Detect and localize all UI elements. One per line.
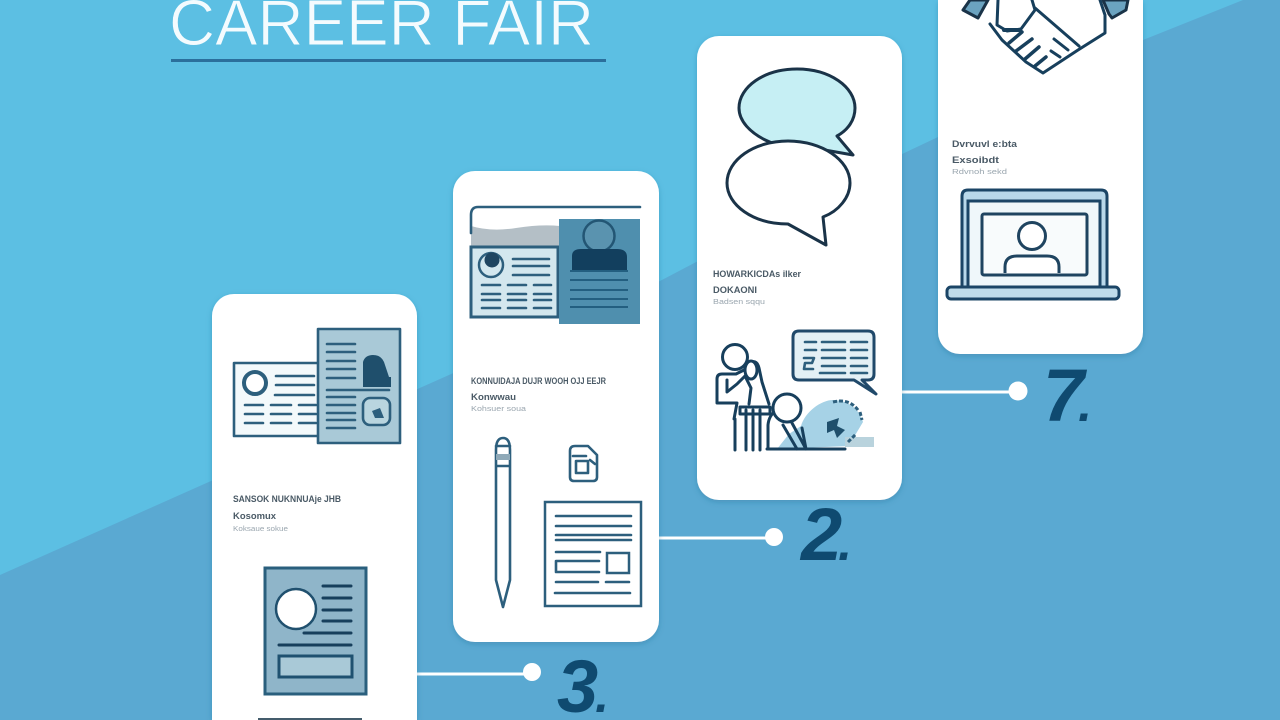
- icon: laptop video call: [947, 190, 1119, 299]
- icon: resume document: [265, 568, 366, 694]
- icon: overlapping resumes: [234, 329, 400, 443]
- icon: handshake: [963, 0, 1128, 73]
- number 2: 2.: [799, 493, 852, 576]
- icon: speech bubbles: [727, 69, 855, 245]
- panel: card two: [453, 171, 659, 642]
- card three heading: HOWARKICDAs ilker: [713, 269, 801, 279]
- connector: step 7: [902, 382, 1028, 400]
- connector: step 3: [417, 663, 541, 681]
- panel: card one: [212, 294, 417, 720]
- card one subheading: Kosomux: [233, 511, 276, 521]
- card three caption: Badsen sqqu: [713, 299, 765, 306]
- illustration: people at table with globe: [717, 344, 874, 450]
- icon: chat panel: [793, 331, 876, 394]
- panel: card three: [697, 36, 902, 500]
- card four subheading: Exsoibdt: [952, 155, 999, 165]
- title underline: [171, 59, 606, 62]
- panel: card four: [938, 0, 1143, 354]
- card four caption: Rdvnoh sekd: [952, 169, 1007, 176]
- card four heading: Dvrvuvl e:bta: [952, 139, 1018, 149]
- card one caption: Koksaue sokue: [233, 526, 288, 533]
- card one heading: SANSOK NUKNNUAje JHB: [233, 494, 341, 504]
- connector: step 2: [659, 528, 783, 546]
- card two heading: KONNUIDAJA DUJR WOOH OJJ EEJR: [471, 376, 606, 386]
- number 7: 7.: [1043, 354, 1092, 437]
- icon: pen: [496, 438, 510, 607]
- card one lower icon edge: [258, 718, 362, 720]
- icon: profile sheets: [471, 207, 640, 324]
- card two subheading: Konwwau: [471, 392, 516, 402]
- icon: form document: [545, 502, 641, 606]
- icon: small file: [570, 446, 597, 481]
- card two caption: Kohsuer soua: [471, 406, 526, 413]
- card three subheading: DOKAONI: [713, 285, 757, 295]
